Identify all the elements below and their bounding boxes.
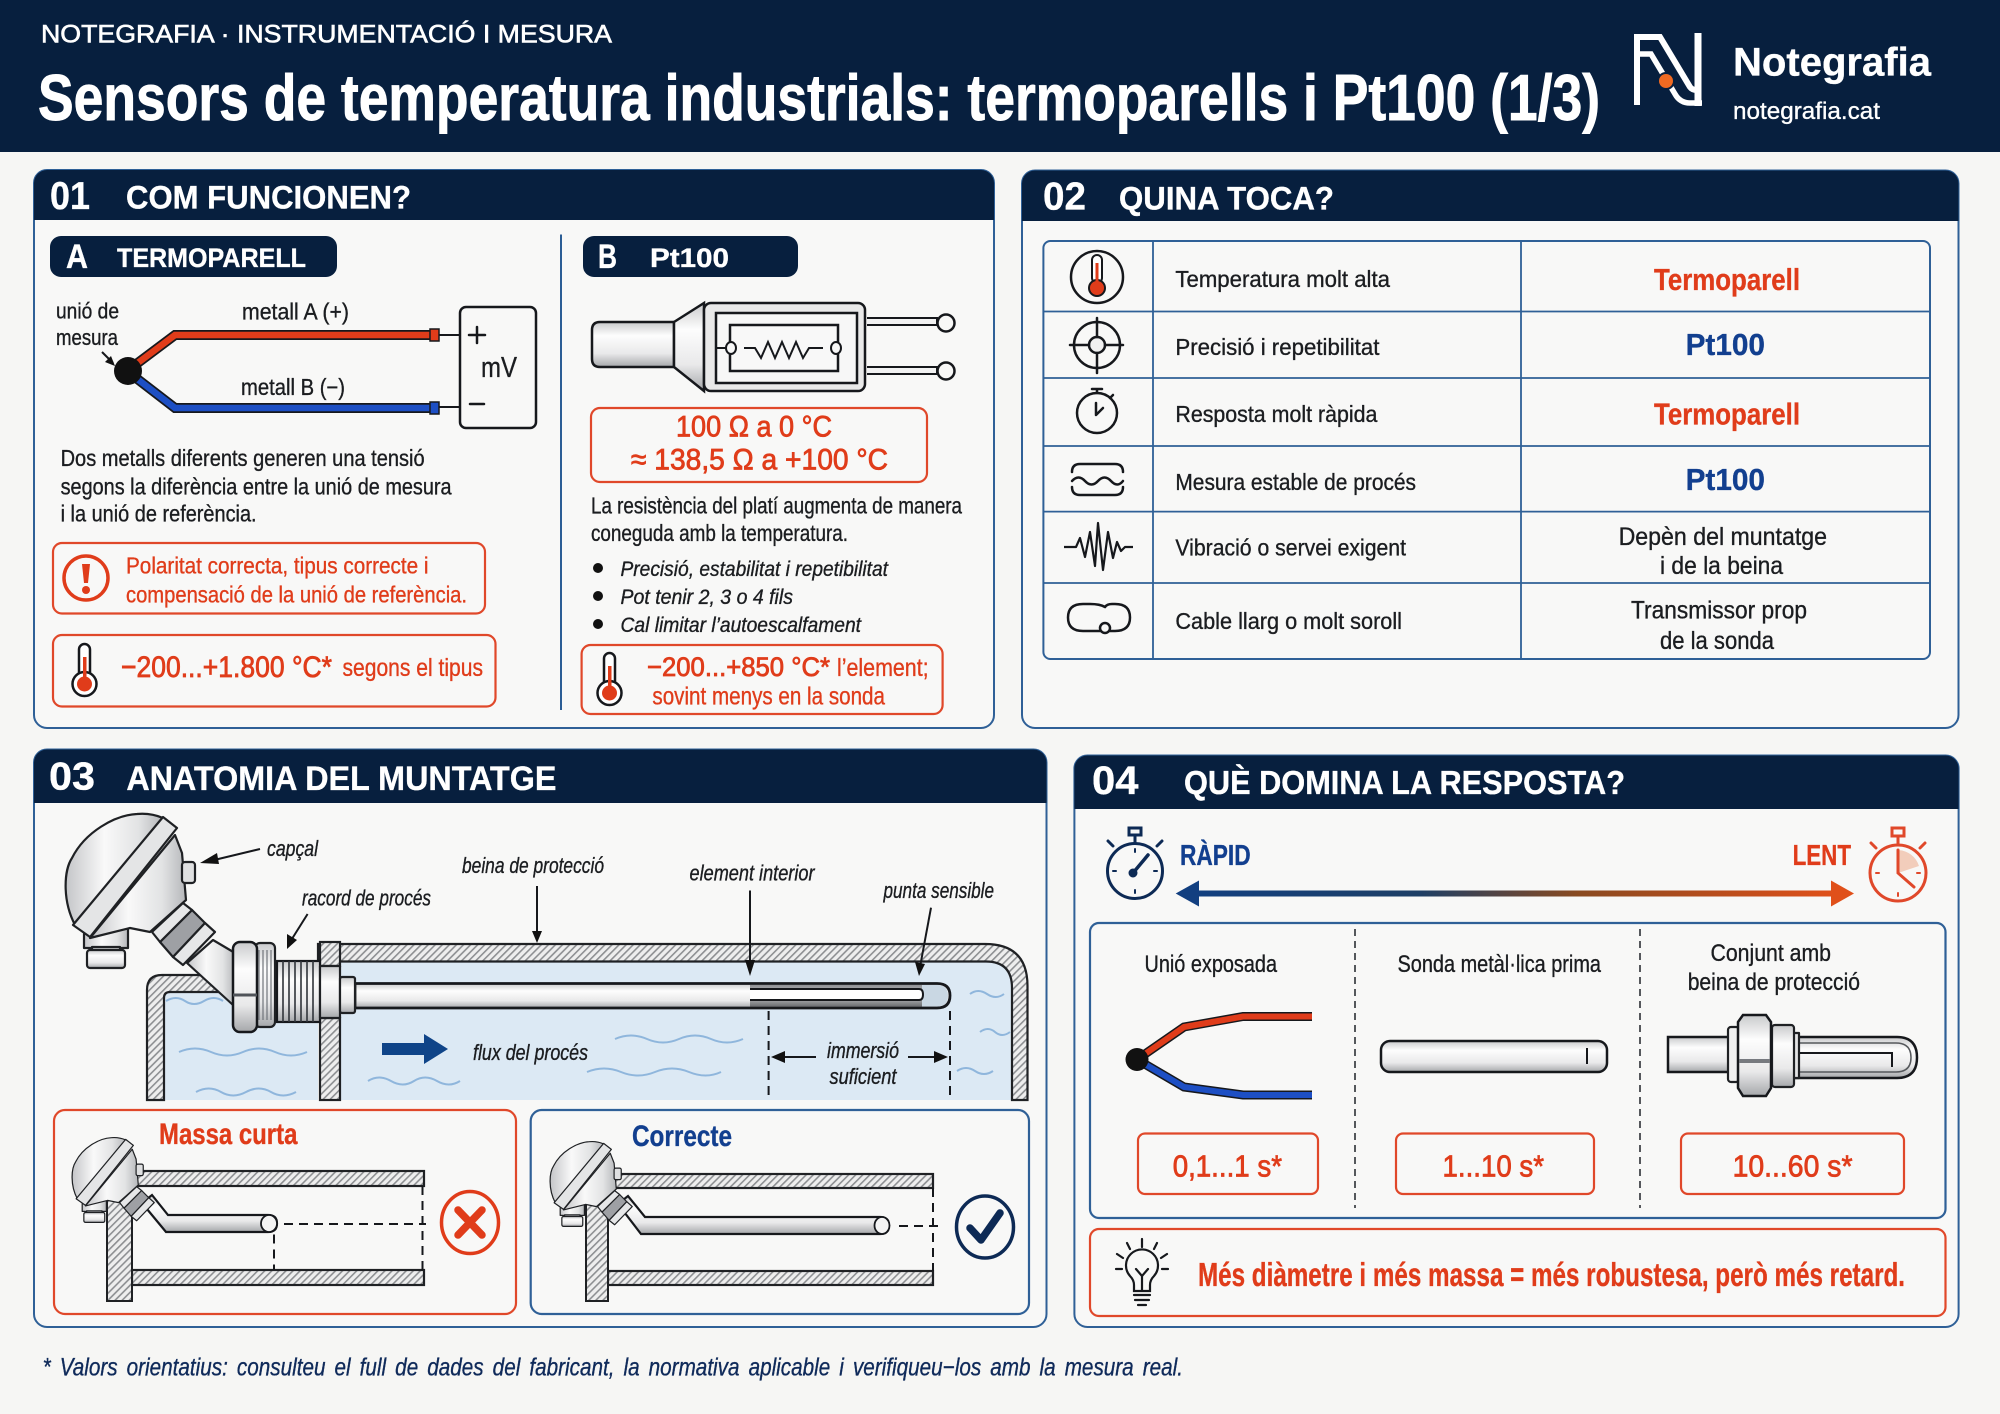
heading: massa curta: Massa curta xyxy=(159,1118,298,1151)
Pt100 explanation: coneguda amb la temperatura. xyxy=(591,520,848,546)
part labels with arrows: capçal xyxy=(267,836,319,861)
callout: Pt100 resistance values xyxy=(591,408,927,482)
response comparison box xyxy=(1090,923,1946,1218)
Pt100 explanation: La resistència del platí augmenta de manera xyxy=(591,492,962,518)
process fitting xyxy=(187,940,235,1005)
immersion dimension: immersió xyxy=(827,1038,899,1063)
column labels: Unió exposada xyxy=(1144,951,1278,978)
column labels: Sonda metàl·lica prima xyxy=(1398,951,1602,978)
selection table xyxy=(1043,241,1930,659)
callout: thermocouple range: segons el tipus xyxy=(342,654,483,682)
table row labels xyxy=(1175,266,1416,634)
table recommendations: Termoparell xyxy=(1654,262,1800,297)
sub-panel: correcte xyxy=(531,1110,1029,1314)
Pt100 bullet list xyxy=(593,558,889,637)
callout: polarity warning: Polaritat correcta, tipus correcte i xyxy=(126,552,428,578)
Pt100 bullet list: Cal limitar l’autoescalfament xyxy=(620,614,862,637)
table row labels: Precisió i repetibilitat xyxy=(1175,334,1380,360)
panel heading 04: QUÈ DOMINA LA RESPOSTA? xyxy=(1184,764,1625,801)
icon: slow stopwatch xyxy=(1870,828,1926,901)
part labels with arrows xyxy=(200,836,994,976)
fast label: RÀPID xyxy=(1180,838,1251,872)
table recommendations: Transmissor prop xyxy=(1631,597,1807,625)
panel number 03: 03 xyxy=(49,756,95,798)
table row labels: Temperatura molt alta xyxy=(1175,266,1390,292)
pill: B Pt100: Pt100 xyxy=(650,243,729,273)
thin probe drawing xyxy=(1381,1041,1607,1072)
table recommendations: Depèn del muntatge xyxy=(1619,523,1827,551)
table recommendations: Termoparell xyxy=(1654,397,1800,432)
thermocouple diagram: unió de xyxy=(56,298,119,324)
thermocouple explanation: i la unió de referència. xyxy=(61,500,257,526)
part labels with arrows: element interior xyxy=(690,861,816,886)
icon: wrong mark xyxy=(442,1192,498,1254)
thermocouple diagram: mV xyxy=(481,352,518,384)
panel: 01 com funcionen xyxy=(34,170,994,728)
pill: B Pt100 xyxy=(583,236,798,277)
title: Sensors de temperatura industrials: termoparells i Pt100 (1/3) xyxy=(38,61,1600,134)
part labels with arrows: beina de protecció xyxy=(462,853,604,878)
water ripples xyxy=(166,991,1010,1096)
header banner xyxy=(0,0,2000,152)
panel: 03 anatomia del muntatge xyxy=(34,750,1046,1327)
table recommendations: de la sonda xyxy=(1660,627,1774,655)
column labels: beina de protecció xyxy=(1688,969,1860,996)
pill: A termoparell xyxy=(50,236,337,277)
column labels: Conjunt amb xyxy=(1710,940,1831,967)
Pt100 explanation xyxy=(591,492,962,546)
brand url: notegrafia.cat xyxy=(1733,98,1880,125)
panel number 01: 01 xyxy=(50,175,90,218)
sub-panel: massa curta xyxy=(54,1110,516,1314)
callout: Pt100 range: sovint menys en la sonda xyxy=(652,682,885,710)
brand name: Notegrafia xyxy=(1733,40,1932,84)
panel heading 01: COM FUNCIONEN? xyxy=(126,180,411,216)
table recommendations: i de la beina xyxy=(1660,552,1783,580)
table row labels: Vibració o servei exigent xyxy=(1175,534,1407,560)
thermocouple diagram: mesura xyxy=(56,325,119,350)
callout: Pt100 range xyxy=(582,645,943,714)
thermocouple explanation: Dos metalls diferents generen una tensió xyxy=(61,445,425,471)
response time values: 1...10 s* xyxy=(1442,1148,1544,1184)
panel number 04: 04 xyxy=(1092,759,1139,803)
exposed junction drawing xyxy=(1126,1016,1312,1095)
response time values: 0,1...1 s* xyxy=(1173,1148,1282,1184)
thermocouple explanation: segons la diferència entre la unió de mesura xyxy=(61,474,452,500)
column labels xyxy=(1144,940,1860,996)
table recommendations xyxy=(1619,262,1827,655)
response time values xyxy=(1138,1134,1904,1194)
arrow: speed scale xyxy=(1176,880,1854,906)
icon: Notegrafia logo xyxy=(1637,33,1702,106)
response time values: 10...60 s* xyxy=(1733,1148,1852,1184)
eyebrow text: NOTEGRAFIA · INSTRUMENTACIÓ I MESURA xyxy=(41,20,612,48)
callout: takeaway xyxy=(1090,1229,1946,1316)
pill: A termoparell: TERMOPARELL xyxy=(117,243,306,273)
callout: thermocouple range: −200...+1.800 °C* xyxy=(121,651,332,684)
Pt100 element diagram xyxy=(592,303,954,391)
callout: Pt100 range: l’element; xyxy=(837,654,929,682)
Pt100 bullet list: Precisió, estabilitat i repetibilitat xyxy=(620,558,889,581)
pill: A termoparell: A xyxy=(66,238,88,276)
heading: correcte: Correcte xyxy=(632,1120,732,1153)
table recommendations: Pt100 xyxy=(1686,462,1765,497)
panel: 02 quina toca xyxy=(1022,170,1958,728)
callout: Pt100 resistance values: ≈ 138,5 Ω a +100 °C xyxy=(631,444,888,477)
icon: light bulb xyxy=(1116,1239,1168,1305)
table row labels: Mesura estable de procés xyxy=(1175,469,1416,495)
callout: Pt100 range: −200...+850 °C* xyxy=(647,652,830,682)
table row labels: Cable llarg o molt soroll xyxy=(1175,608,1402,634)
pill: B Pt100: B xyxy=(598,238,617,276)
Pt100 bullet list: Pot tenir 2, 3 o 4 fils xyxy=(620,586,793,609)
thermocouple diagram: metall A (+) xyxy=(242,298,349,324)
slow label: LENT xyxy=(1793,840,1851,872)
callout: polarity warning: compensació de la unió de referència. xyxy=(126,582,467,608)
thermocouple diagram xyxy=(56,298,536,428)
part labels with arrows: racord de procés xyxy=(302,886,431,910)
icon: cable loop xyxy=(1068,604,1130,633)
icon: stopwatch xyxy=(1077,389,1117,433)
assembly diagram xyxy=(66,814,1027,1101)
icon: correct mark xyxy=(956,1196,1014,1258)
probe sheath xyxy=(355,984,950,1008)
icon: fast stopwatch xyxy=(1108,828,1162,898)
terminal head xyxy=(66,814,215,968)
table row labels: Resposta molt ràpida xyxy=(1175,401,1378,427)
callout: polarity warning xyxy=(53,543,485,614)
icon: vibration xyxy=(1064,523,1133,570)
flow label: flux del procés xyxy=(473,1040,588,1065)
panel number 02: 02 xyxy=(1043,176,1086,218)
immersion dimension xyxy=(769,1011,950,1101)
icon: crosshair xyxy=(1070,318,1123,373)
callout: thermocouple range xyxy=(53,635,496,706)
thermowell assembly drawing xyxy=(1668,1015,1917,1096)
immersion dimension: suficient xyxy=(830,1064,897,1089)
part labels with arrows: punta sensible xyxy=(883,878,994,903)
footnote: * Valors orientatius: consulteu el full de dades del fabricant, la normativa aplicable i verifiqueu−los amb la mesura real. xyxy=(43,1354,1183,1382)
table recommendations: Pt100 xyxy=(1686,327,1765,362)
icon: stable measurement xyxy=(1072,464,1123,495)
panel heading 02: QUINA TOCA? xyxy=(1119,180,1334,216)
icon: thermometer in circle xyxy=(1071,251,1123,303)
panel: 04 que domina la resposta xyxy=(1074,756,1959,1327)
panel heading 03: ANATOMIA DEL MUNTATGE xyxy=(126,760,556,798)
thermocouple diagram: metall B (−) xyxy=(241,374,345,400)
thermocouple explanation xyxy=(61,445,452,526)
callout: Pt100 resistance values: 100 Ω a 0 °C xyxy=(676,410,832,444)
arrow: process flow xyxy=(382,1034,448,1064)
